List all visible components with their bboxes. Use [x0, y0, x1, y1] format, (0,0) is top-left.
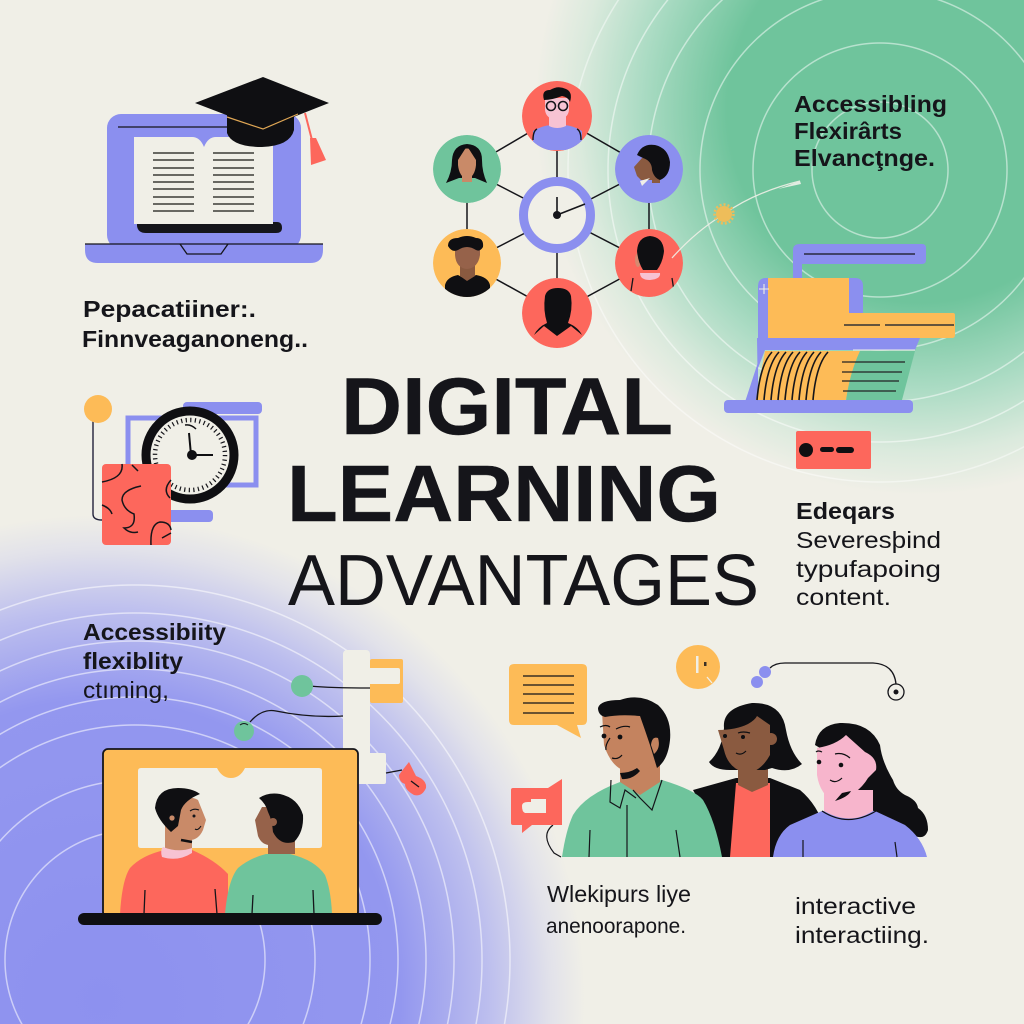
text: top right caption: [794, 91, 947, 171]
icon: folder: [759, 278, 955, 338]
panel: learner network: [433, 81, 683, 348]
icon: monitor: [128, 402, 262, 522]
text: left caption: [83, 619, 226, 703]
text: right caption: Severesþind: [796, 527, 941, 553]
title: DIGITAL: [341, 362, 673, 452]
icon: coral patterned block: [102, 464, 171, 545]
text: right caption: typufapoing: [796, 556, 941, 582]
panel: video call laptop: [78, 650, 426, 925]
icon: connector nodes: [234, 675, 370, 741]
icon: yellow info circle: [676, 645, 720, 689]
avatar: lower right: [615, 229, 683, 297]
icon: laptop: [724, 244, 926, 413]
text: laptop caption: Pepacatiiner:.: [83, 296, 256, 322]
icon: coral chat bubble: [511, 779, 562, 857]
title: ADVANTAGES: [288, 541, 759, 621]
panel: three learners with chat: [509, 645, 928, 857]
text: left caption: Accessibiity: [83, 619, 226, 645]
caption: interactive: interactiing.: [795, 922, 929, 948]
icon: yellow pin: [84, 395, 112, 520]
connector: sunburst to folder: [672, 181, 801, 258]
text: left caption: flexiblity: [83, 648, 183, 674]
caption: live learning: Wlekipurs liye: [547, 881, 691, 907]
panel: laptop with book and graduation cap: [85, 77, 329, 263]
icon: laptop: [85, 114, 323, 263]
icon: yellow speech bubble: [509, 664, 587, 738]
icon: connector loop: [751, 663, 904, 700]
panel: folder and documents laptop: [724, 244, 955, 413]
icon: wall clock: [146, 411, 234, 499]
text: top right caption: Flexirârts: [794, 118, 902, 144]
text: top right caption: Accessibling: [794, 91, 947, 117]
avatar: lower left: [433, 229, 501, 300]
text: top right caption: Elvancţnge.: [794, 145, 935, 171]
caption: interactive: [795, 893, 929, 948]
text: right caption: content.: [796, 584, 891, 610]
icon: laptop screen: [103, 749, 358, 917]
icon: woman right: [773, 723, 928, 857]
network links: [467, 116, 649, 313]
avatar: bottom: [522, 278, 592, 348]
title: LEARNING: [287, 449, 721, 538]
icon: man front: [562, 697, 722, 857]
icon: coral pin: [386, 762, 426, 795]
icon: woman centre: [693, 703, 826, 857]
text: right caption: [796, 498, 941, 610]
avatar: top: [522, 81, 592, 151]
avatar: upper right: [615, 135, 683, 203]
text: left caption: ctıming,: [83, 677, 169, 703]
icon: central clock: [524, 182, 590, 248]
text: laptop caption: [82, 296, 308, 352]
caption: interactive: interactive: [795, 893, 916, 919]
text: laptop caption: Finnveaganoneng..: [82, 326, 308, 352]
icon: person left: [120, 788, 228, 914]
icon: coral tag: [796, 431, 871, 469]
text: right caption: Edeqars: [796, 498, 895, 524]
avatar: upper left: [433, 135, 501, 203]
caption: live learning: anenoorapone.: [546, 914, 686, 938]
text: bottom captions: [546, 881, 929, 948]
icon: open book: [134, 137, 282, 233]
icon: laptop base: [78, 913, 382, 925]
title: [287, 362, 759, 621]
icon: key-shaped post: [343, 650, 403, 784]
icon: graduation cap: [195, 77, 329, 165]
caption: live learning: [546, 881, 691, 938]
panel: clock and screen: [84, 395, 262, 545]
icon: person right: [225, 794, 332, 914]
icon: fanned pages: [756, 351, 915, 400]
